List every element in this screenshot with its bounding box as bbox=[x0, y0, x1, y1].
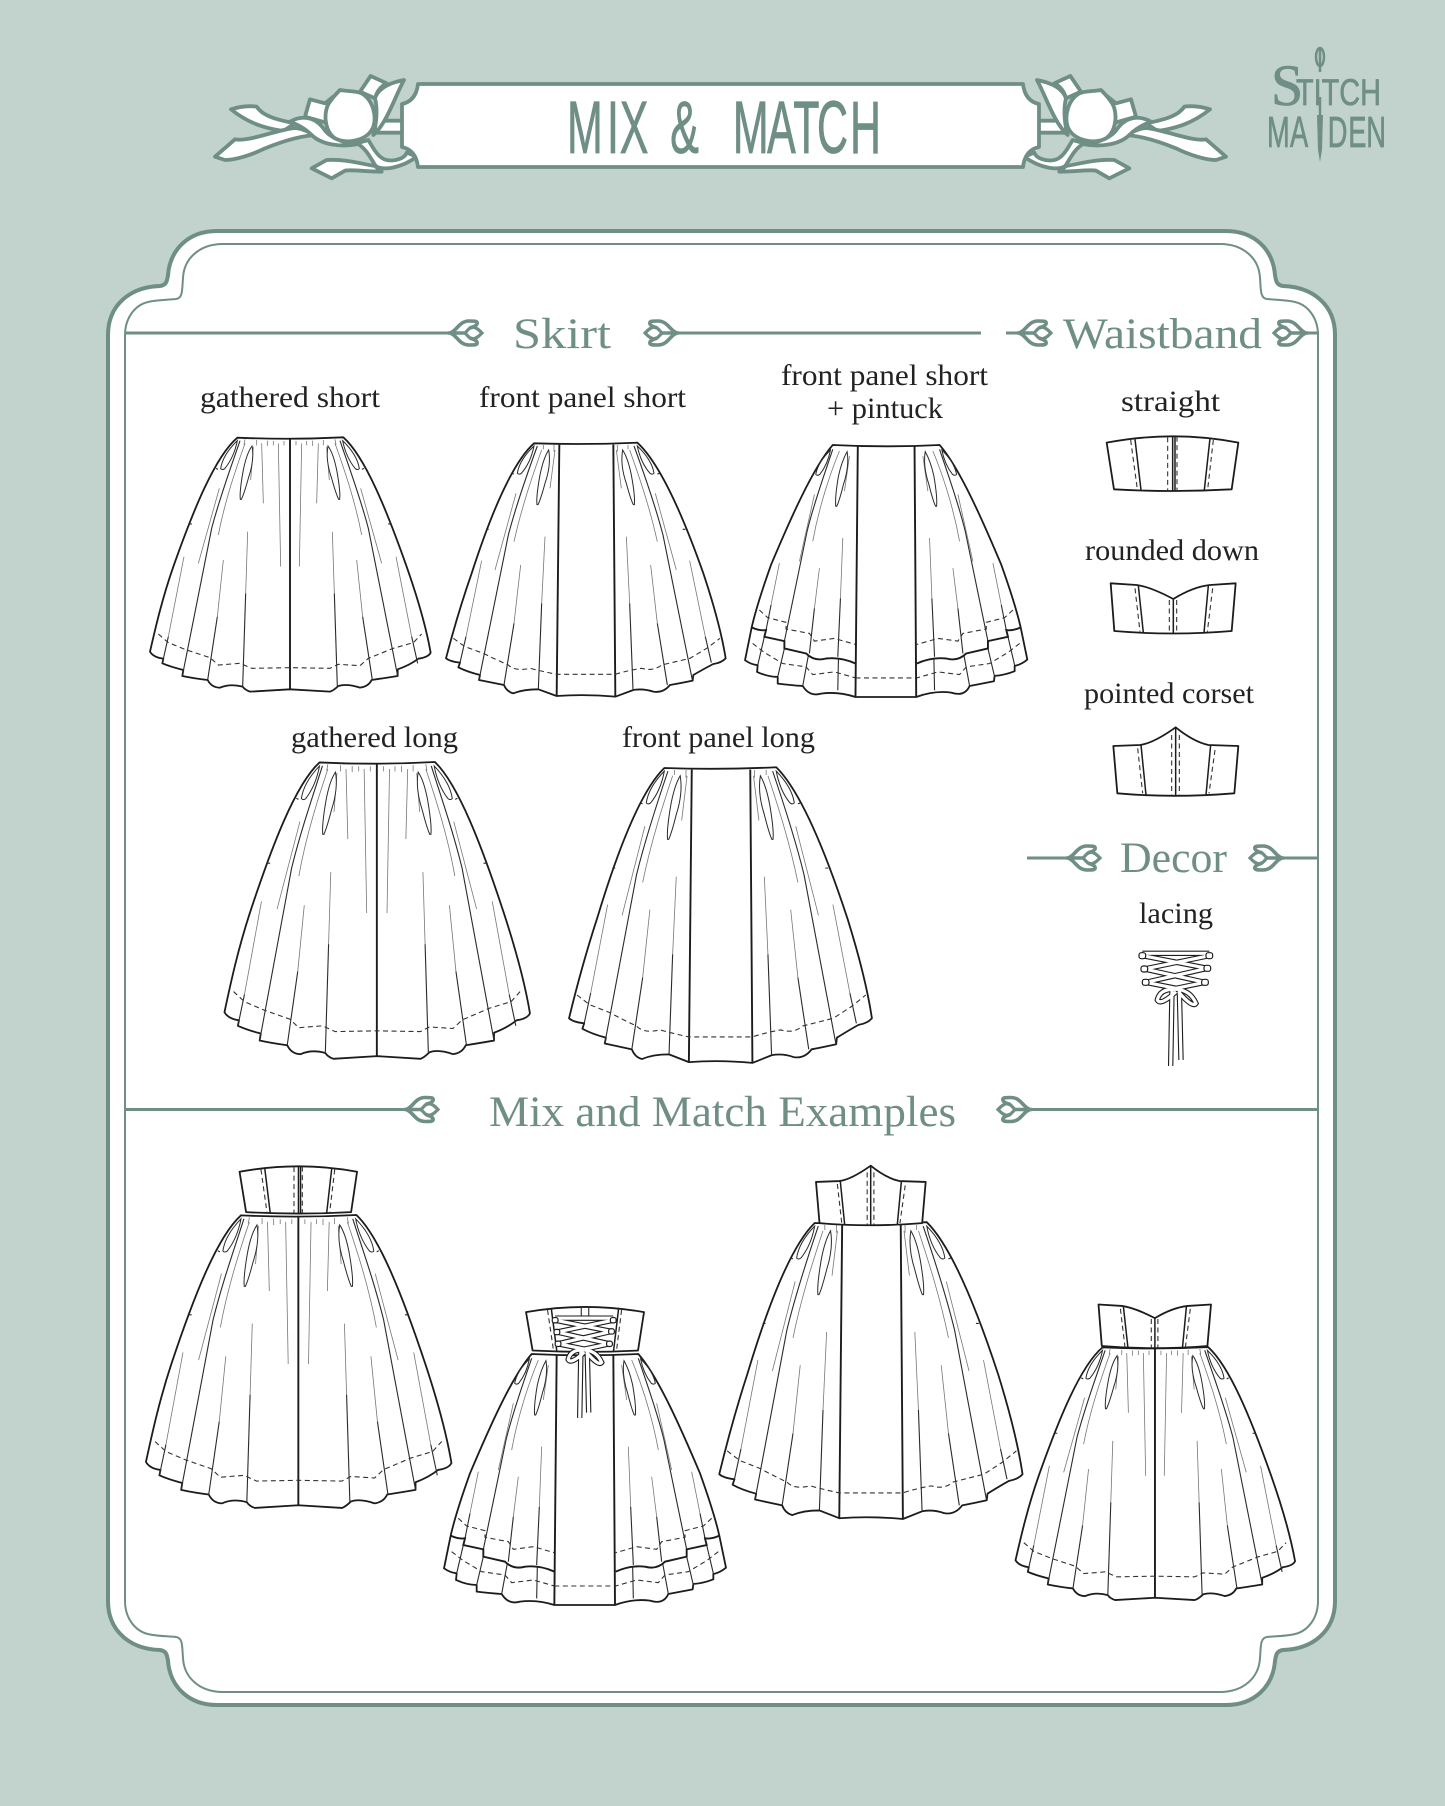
ornament: right flower bbox=[1024, 76, 1226, 178]
heading: Skirt: Skirt bbox=[513, 311, 611, 358]
label: front panel short + pintuck bbox=[781, 359, 989, 425]
skirt: front panel short + pintuck bbox=[745, 445, 1027, 697]
example: straight waistband + lacing + panel pintuck bbox=[444, 1307, 726, 1605]
label: front panel short: front panel short bbox=[479, 381, 687, 414]
example: rounded waistband + gathered short bbox=[1016, 1304, 1295, 1600]
logo: Stitch Maiden bbox=[1267, 48, 1386, 162]
waistband: straight bbox=[1107, 436, 1238, 491]
skirt: gathered short bbox=[150, 437, 431, 692]
heading: Decor bbox=[1027, 835, 1319, 882]
heading: Mix and Match Examples bbox=[125, 1089, 1319, 1136]
waistband: pointed corset bbox=[1113, 727, 1238, 796]
label: lacing: lacing bbox=[1139, 897, 1213, 930]
label: gathered short: gathered short bbox=[200, 381, 381, 414]
example: pointed waistband + panel long bbox=[719, 1166, 1023, 1519]
logo: Stitch Maiden: MAIDEN bbox=[1267, 107, 1386, 157]
logo: Stitch Maiden: TITCH bbox=[1296, 73, 1381, 114]
heading: Waistband bbox=[1006, 311, 1319, 358]
label: front panel long: front panel long bbox=[622, 721, 815, 754]
label: gathered long: gathered long bbox=[291, 721, 458, 754]
heading: Waistband: Waistband bbox=[1063, 311, 1262, 358]
label: front panel short + pintuck: front panel short bbox=[781, 359, 989, 392]
decor: lacing bbox=[1139, 953, 1213, 1066]
label: front panel short + pintuck: + pintuck bbox=[827, 392, 943, 425]
panel: main frame bbox=[108, 231, 1335, 1705]
waistband: rounded down bbox=[1111, 583, 1236, 633]
heading: Mix and Match Examples: Mix and Match Examples bbox=[489, 1089, 956, 1136]
skirt: gathered long bbox=[224, 762, 530, 1059]
banner plaque bbox=[402, 84, 1039, 167]
title banner bbox=[215, 76, 1226, 178]
skirt: front panel short bbox=[446, 443, 726, 697]
label: pointed corset: pointed corset bbox=[1084, 677, 1255, 710]
heading: Skirt bbox=[125, 311, 981, 358]
label: straight: straight bbox=[1121, 385, 1221, 418]
logo: Stitch Maiden: S bbox=[1271, 53, 1303, 118]
ornament: left flower bbox=[215, 76, 417, 178]
heading: Decor: Decor bbox=[1120, 835, 1227, 882]
skirt: front panel long bbox=[569, 767, 872, 1063]
title: MIX & MATCH bbox=[567, 86, 881, 169]
example: straight waistband + gathered long bbox=[146, 1166, 451, 1508]
label: rounded down: rounded down bbox=[1085, 534, 1259, 567]
